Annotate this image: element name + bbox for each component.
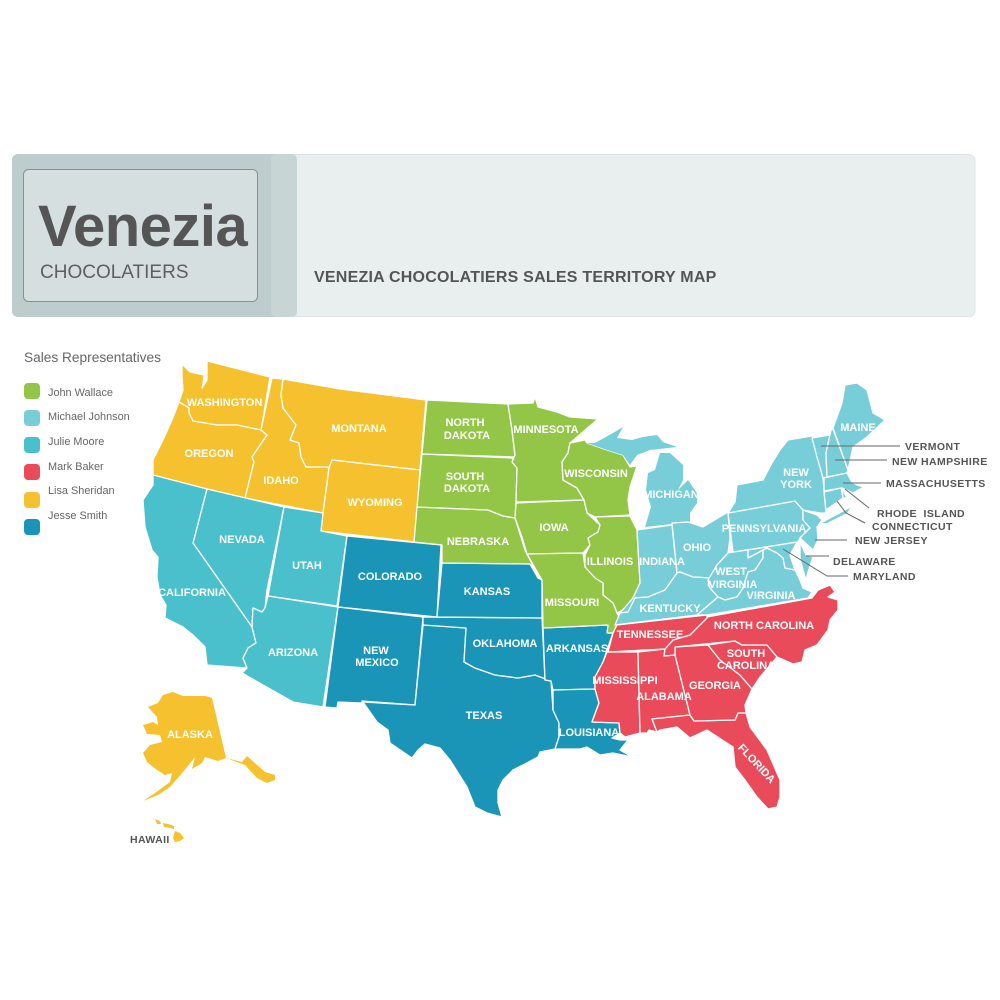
territory: Lisa Sheridan [143,361,426,842]
West: MONTANA [331,423,387,435]
legend item: Julie Moore [24,436,104,453]
map title: VENEZIA CHOCOLATIERS SALES TERRITORY MAP [314,269,717,286]
East: INDIANA [639,556,685,568]
Central: SOUTH [446,471,484,483]
logo subtitle: CHOCOLATIERS [40,262,189,283]
legend heading: Sales Representatives [24,350,161,365]
Central: ILLINOIS [587,556,633,568]
Central: TEXAS [466,710,502,722]
West: ARIZONA [268,647,318,659]
legend item: John Wallace: John Wallace [48,387,113,399]
East [592,422,876,703]
West: UTAH [292,560,322,572]
West: NEVADA [219,534,265,546]
West: OREGON [185,448,233,460]
Central: WISCONSIN [564,468,628,480]
West: ALASKA [167,729,213,741]
callout: Connecticut [837,501,953,533]
legend item: Mark Baker [24,461,104,480]
territory: John Wallace [414,397,640,633]
legend item: Jesse Smith: Jesse Smith [48,510,107,522]
callout: Maryland: MARYLAND [853,571,916,583]
Central: DAKOTA [444,483,490,495]
East: ALABAMA [636,691,692,703]
map: US states [143,361,885,842]
legend item: Lisa Sheridan [24,485,115,508]
Central: NEW [363,645,389,657]
callout: New Jersey: NEW JERSEY [855,535,928,547]
logo box [24,170,258,302]
West: CALIFORNIA [158,587,226,599]
callout: Connecticut: CONNECTICUT [872,521,953,533]
Florida label (rotated): FLORIDA [735,742,777,786]
territory: Jesse Smith [325,536,632,817]
callout: New Jersey [815,535,928,547]
East: WEST [715,566,747,578]
logo wordmark: Venezia [38,194,249,259]
callout: Maryland [783,549,916,583]
header left block [12,154,282,317]
legend item: Mark Baker: Mark Baker [48,461,104,473]
East: MICHIGAN [643,489,699,501]
East: TENNESSEE [617,629,683,641]
East: NEW [783,467,809,479]
territory: Michael Johnson [587,383,885,625]
Central: MEXICO [355,657,399,669]
East: SOUTH [727,648,765,660]
Central: KANSAS [464,586,510,598]
Central [355,417,633,739]
Central: IOWA [539,522,569,534]
Central: MINNESOTA [513,424,579,436]
Central: OKLAHOMA [473,638,537,650]
East: CAROLINA [717,660,775,672]
Central: LOUISIANA [559,727,619,739]
East: PENNSYLVANIA [722,523,806,535]
Central: ARKANSAS [546,643,608,655]
callout: New Hampshire: NEW HAMPSHIRE [892,456,988,468]
West: WASHINGTON [187,397,262,409]
callout: Delaware: DELAWARE [833,556,896,568]
header panel [12,154,975,317]
callout: Massachusetts: MASSACHUSETTS [886,478,986,490]
callout: Vermont: VERMONT [905,441,960,453]
Central: NORTH [445,417,485,429]
territory: Julie Moore [143,475,347,707]
West [158,397,402,741]
East: MAINE [840,422,876,434]
territory: Mark Baker [592,585,838,809]
legend [24,350,161,535]
East: KENTUCKY [639,603,701,615]
header tab [271,154,297,317]
callout: Hawaii: HAWAII [130,834,170,846]
legend item: Michael Johnson [24,410,130,426]
callouts: northeastern states [130,441,988,846]
legend item: Julie Moore: Julie Moore [48,436,104,448]
state labels [158,397,876,741]
legend item: Lisa Sheridan: Lisa Sheridan [48,485,115,497]
East: MISSISSIPPI [592,675,658,687]
East: NORTH CAROLINA [714,620,814,632]
legend item: John Wallace [24,383,113,399]
Central: MISSOURI [545,597,599,609]
East: VIRGINIA [747,590,795,602]
East: OHIO [683,542,711,554]
callout: Rhode Island [845,489,965,520]
Central: DAKOTA [444,430,490,442]
callout: Delaware [806,556,896,568]
Central: COLORADO [358,571,423,583]
West: WYOMING [348,497,402,509]
callout: Rhode Island: RHODE ISLAND [877,508,965,520]
East: YORK [780,479,812,491]
Central: NEBRASKA [447,536,509,548]
callout: Vermont [821,441,960,453]
legend item: Michael Johnson: Michael Johnson [48,411,130,423]
West: IDAHO [263,475,299,487]
East: VIRGINIA [709,579,757,591]
East: GEORGIA [689,680,741,692]
legend item: Jesse Smith [24,510,107,535]
